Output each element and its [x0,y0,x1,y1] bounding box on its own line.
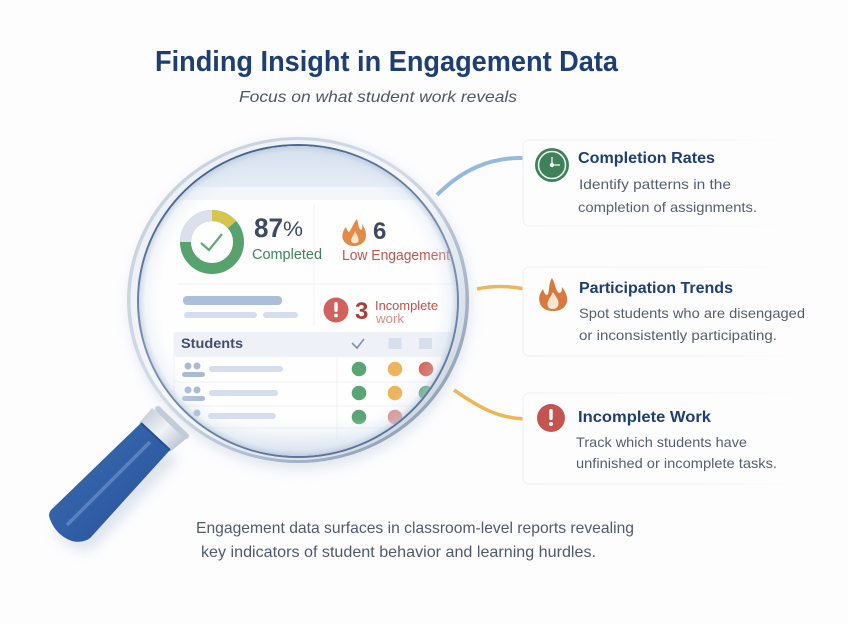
row 2 [182,386,433,401]
row 3 [194,410,402,424]
text: incomplete work: unfinished or incomplete tasks. [576,455,777,471]
text: participation trends [579,305,805,343]
placeholder summary bars [183,296,298,318]
panel: completion rates [523,140,790,226]
caption [196,520,634,561]
connector: incomplete work [454,390,525,419]
handle collar [158,409,186,436]
glass sheen [139,146,457,456]
stat: low engagement [342,218,450,264]
stat: incomplete work [324,298,438,323]
stat: 87% completed: 87 [254,213,283,243]
connector: participation trends [477,286,525,289]
caption: key indicators of student behavior and learning hurdles. [201,544,596,561]
icon: magnifying glass [49,137,471,550]
stat: incomplete work: 3 [355,298,368,325]
text: completion rates [578,176,757,215]
heading: participation trends: Participation Trends [579,280,733,297]
text: completion rates: Identify patterns in the [579,176,731,192]
text: completion rates: completion of assignments. [578,199,757,215]
icon: clock [535,148,569,182]
panel: incomplete work [523,393,800,484]
connector: completion rates [437,158,524,195]
panel: participation trends [523,267,805,356]
text: participation trends: or inconsistently participating. [579,327,777,343]
subtitle: Focus on what student work reveals [239,89,517,106]
row 1 [182,362,433,377]
text: participation trends: Spot students who are disengaged [579,305,805,321]
icon: small flame [342,219,366,246]
handle top cap [141,423,170,450]
stat: incomplete work: work [375,312,405,326]
stat: 87% completed: Completed [252,247,322,263]
handle neck [139,408,187,452]
icon: alert [537,404,565,432]
table: students [174,332,464,440]
stat: incomplete work: Incomplete [375,299,438,313]
handle shadow [54,432,178,550]
text: incomplete work [576,434,777,471]
stat: 87% completed: % [283,218,303,241]
donut: 87% completed [186,215,238,268]
icon: flame [539,278,567,311]
caption: Engagement data surfaces in classroom-level reports revealing [196,520,634,537]
stat: low engagement: 6 [373,218,386,245]
bottom glass fade [220,421,377,456]
table: students: Students [181,335,243,351]
lens contents: dashboard [139,146,457,456]
handle grip [49,423,170,542]
icon: check [201,234,222,250]
handle highlight [67,442,150,525]
title: Finding Insight in Engagement Data [155,46,619,78]
text: incomplete work: Track which students have [576,434,747,450]
lens rim [127,137,469,463]
heading: completion rates: Completion Rates [578,150,715,167]
stat: 87% completed [252,218,322,262]
heading: incomplete work: Incomplete Work [578,409,711,426]
lens drop shadow [129,140,471,470]
stat: low engagement: Low Engagement [342,248,450,264]
